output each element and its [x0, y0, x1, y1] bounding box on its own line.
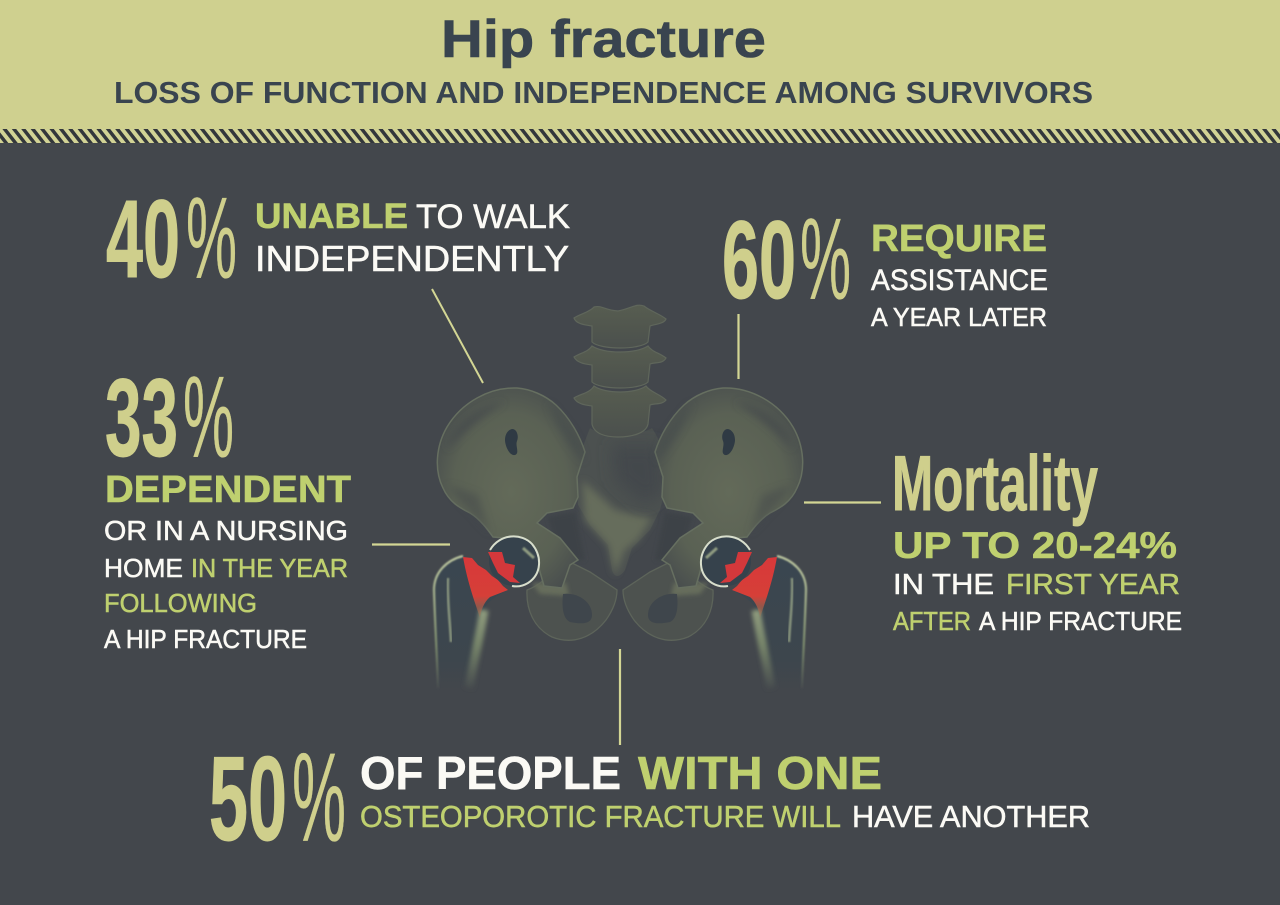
figure 33%: 33 [105, 357, 178, 480]
text: dependent or in a nursing home: HOME [104, 553, 183, 583]
text: dependent or in a nursing home: OR IN A NURSING [104, 515, 348, 546]
text: require assistance a year later: REQUIRE [871, 218, 1047, 260]
callout line: 50% [619, 649, 621, 745]
text: require assistance a year later [871, 218, 1048, 332]
text: unable to walk independently: INDEPENDENTLY [255, 238, 569, 279]
stat: 40% unable to walk: % [186, 173, 237, 303]
stat: 50% another fracture [209, 727, 1090, 868]
callout line: 33% [372, 543, 450, 546]
text: of people with one osteoporotic fracture: OF PEOPLE [360, 747, 621, 799]
text: require assistance a year later: A YEAR LATER [871, 302, 1047, 332]
text: dependent or in a nursing home: FOLLOWING [104, 588, 257, 618]
stat: 40% unable to walk [106, 173, 570, 303]
text: up to 20-24% in the first year [893, 525, 1182, 636]
text: up to 20-24% in the first year: FIRST YEAR [1006, 569, 1180, 601]
pelvis illustration [433, 305, 807, 690]
text: up to 20-24% in the first year: AFTER [893, 606, 971, 636]
figure 40%: 40 [106, 178, 180, 301]
figure 50%: 50 [209, 732, 287, 866]
stat: 33% dependent: % [183, 352, 234, 482]
text: dependent or in a nursing home [104, 469, 351, 654]
text: dependent or in a nursing home: DEPENDENT [105, 469, 351, 511]
text: of people with one osteoporotic fracture: OSTEOPOROTIC FRACTURE WILL [360, 799, 841, 834]
text: up to 20-24% in the first year: A HIP FRACTURE [979, 606, 1182, 636]
stat: 60% require assistance [722, 194, 1048, 332]
stat: 50% another fracture: % [292, 727, 346, 868]
figure 60%: 60 [722, 199, 796, 322]
text: unable to walk independently [255, 197, 570, 279]
callout line: mortality [804, 501, 881, 504]
text: of people with one osteoporotic fracture: WITH ONE [638, 747, 882, 799]
text: up to 20-24% in the first year: IN THE [893, 569, 994, 601]
subtitle: LOSS OF FUNCTION AND INDEPENDENCE AMONG SURVIVORS [114, 75, 1093, 110]
sacrum [576, 428, 668, 576]
text: dependent or in a nursing home: IN THE YEAR [191, 553, 348, 583]
text: unable to walk independently: TO WALK [416, 198, 570, 236]
vertebrae [574, 305, 666, 437]
text: of people with one osteoporotic fracture [360, 747, 1090, 834]
header band [0, 0, 1280, 143]
callout line: 40% [432, 289, 483, 383]
stat: 60% require assistance: % [800, 194, 851, 324]
text: require assistance a year later: ASSISTANCE [871, 264, 1048, 297]
left hip half [433, 388, 617, 690]
text: up to 20-24% in the first year: UP TO 20-24% [893, 525, 1177, 566]
stat: mortality [892, 439, 1182, 636]
title: Hip fracture [441, 10, 766, 69]
heading: mortality: Mortality [892, 439, 1098, 527]
right hip half [623, 388, 807, 690]
text: of people with one osteoporotic fracture: HAVE ANOTHER [852, 799, 1090, 834]
callout line: 60% [737, 314, 740, 379]
text: unable to walk independently: UNABLE [255, 197, 408, 236]
stat: 33% dependent [104, 352, 351, 654]
text: dependent or in a nursing home: A HIP FRACTURE [104, 624, 307, 654]
